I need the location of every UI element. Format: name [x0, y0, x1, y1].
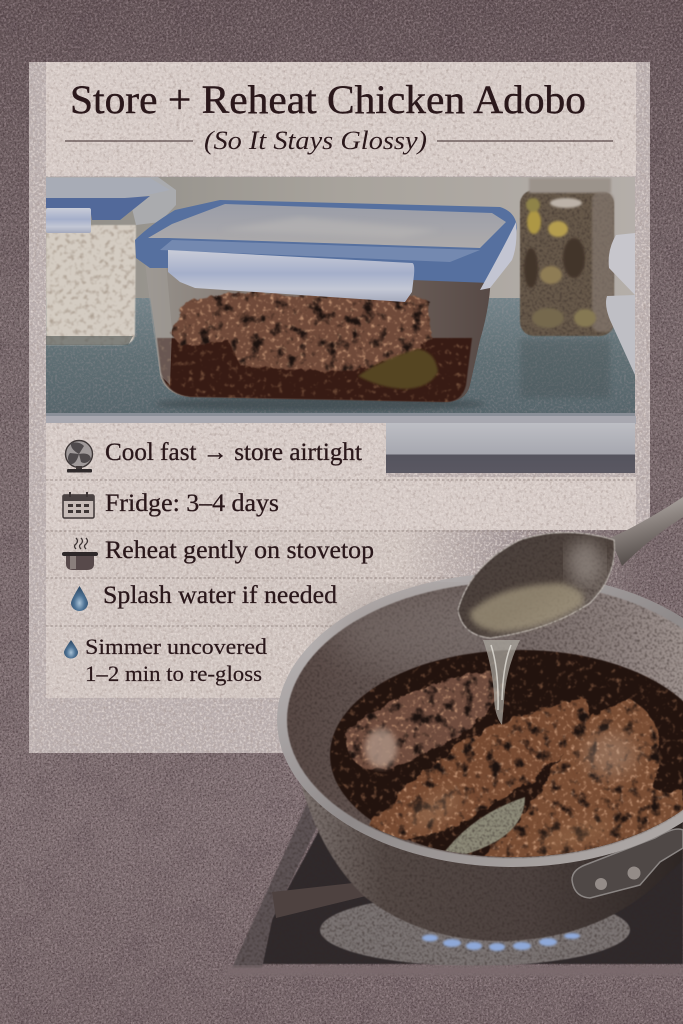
main container shadow	[155, 397, 485, 411]
food in container	[157, 292, 472, 402]
right white containers	[606, 233, 635, 375]
drumstick bone end	[365, 728, 397, 768]
spoon	[458, 497, 683, 638]
jar reflection	[520, 338, 610, 398]
spoon bowl	[458, 532, 614, 638]
panel: outer backing card	[29, 62, 650, 753]
icon: water drop	[71, 586, 88, 611]
step: fridge: Fridge: 3–4 days	[105, 490, 279, 517]
lid clip front	[168, 250, 414, 302]
main glass container	[145, 262, 491, 402]
chicken highlights	[403, 733, 636, 854]
left clip	[46, 208, 91, 233]
pan rim	[277, 573, 683, 867]
step: simmer: Simmer uncovered	[85, 634, 267, 659]
main lid	[135, 200, 517, 302]
blue flames	[422, 933, 580, 951]
panel: steps list card	[46, 423, 640, 698]
chicken drumstick three	[482, 700, 683, 862]
step: simmer: 1–2 min to re-gloss	[85, 661, 262, 686]
step: reheat	[62, 537, 374, 570]
grate bar	[233, 804, 316, 968]
water stream	[483, 640, 520, 725]
spoon broth	[470, 583, 584, 632]
icon: small water drop	[64, 640, 78, 658]
icon: steaming pot	[62, 538, 98, 570]
spoon handle	[610, 497, 683, 566]
panel: title card	[46, 62, 636, 176]
step: cool fast: Cool fast → store airtight	[105, 439, 362, 466]
step: reheat: Reheat gently on stovetop	[105, 537, 374, 564]
chicken drumstick one	[345, 670, 500, 770]
jar	[520, 178, 614, 336]
bay leaf	[445, 796, 526, 854]
photo: stove, pan and spoon	[225, 497, 683, 976]
bay leaf in container	[358, 349, 438, 389]
lid clip side	[480, 222, 516, 290]
subtitle with rules: (So It Stays Glossy)	[204, 126, 427, 155]
left rice container	[46, 177, 176, 345]
stove and grate	[225, 797, 683, 976]
photo: glass container in fridge	[46, 177, 635, 416]
icon: fan	[66, 440, 92, 472]
fridge shelf rail	[386, 423, 635, 473]
step dividers	[46, 480, 636, 626]
stove bottom fade	[225, 966, 683, 976]
spoon highlight	[567, 540, 603, 584]
adobo sauce	[330, 650, 683, 860]
burner ring	[320, 902, 630, 966]
chicken drumstick two	[362, 698, 592, 842]
pan handle	[572, 829, 683, 898]
step: simmer	[64, 634, 267, 686]
shelf front edge	[46, 413, 635, 416]
step: cool fast	[66, 439, 362, 472]
pan contents	[330, 650, 683, 862]
title: Store + Reheat Chicken Adobo	[70, 77, 586, 122]
pan inner wall	[287, 582, 683, 858]
grate crossbar	[272, 882, 366, 918]
step: splash: Splash water if needed	[103, 582, 338, 609]
fridge shelf strip	[46, 416, 636, 424]
steam inside pan	[330, 590, 510, 670]
pan body	[300, 780, 683, 941]
icon: calendar	[63, 492, 94, 518]
